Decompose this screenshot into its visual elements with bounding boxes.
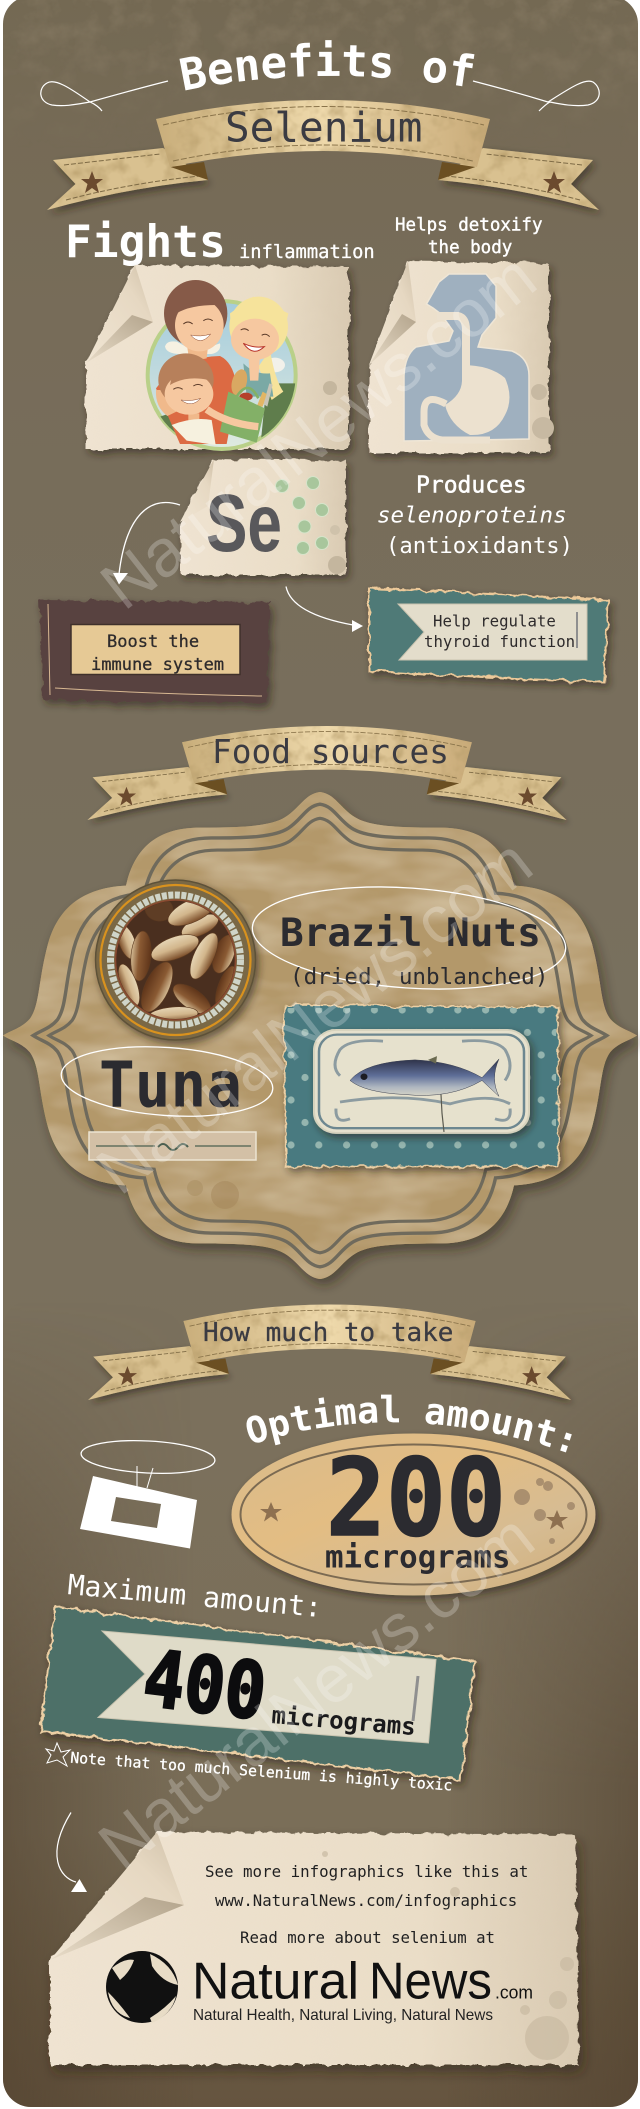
arrow: to footer bbox=[57, 1812, 87, 1892]
label: immune system: immune system bbox=[91, 655, 224, 675]
icon: selenium molecules bbox=[276, 476, 328, 554]
badge: 200 micrograms: 200 bbox=[326, 1437, 506, 1561]
panel: Se paper bbox=[180, 459, 346, 575]
heading: Helps detoxify the body: Helps detoxify bbox=[395, 216, 543, 236]
text: dried, unblanched: (dried, unblanched) bbox=[290, 964, 548, 990]
ribbon: How much to take: How much to take bbox=[203, 1318, 453, 1348]
ribbon: Selenium bbox=[47, 100, 599, 210]
badge: 200 micrograms bbox=[232, 1434, 596, 1596]
panel: tuna can card bbox=[284, 1005, 558, 1166]
text: see more infographics: See more infographics like this at bbox=[205, 1862, 528, 1881]
watermarks: NaturalNews.com: NaturalNews.com bbox=[83, 824, 546, 1209]
panel: boost the immune system bbox=[39, 600, 270, 703]
logo: Natural News wordmark: Natural bbox=[192, 1952, 359, 2010]
outline: tuna ellipse bbox=[59, 1040, 275, 1123]
heading: Maximum amount: Maximum amount: bbox=[66, 1568, 323, 1624]
decorative label plate bbox=[89, 1132, 256, 1160]
text: Brazil Nuts: Brazil Nuts bbox=[280, 910, 541, 956]
heading: Fights inflammation: inflammation bbox=[239, 242, 375, 263]
text: see more infographics: Read more about selenium at bbox=[240, 1928, 495, 1947]
ribbon: Selenium: Selenium bbox=[225, 104, 422, 152]
icon: star note marker bbox=[46, 1743, 70, 1766]
text: Tuna: Tuna bbox=[99, 1048, 242, 1122]
panel: footer paper bbox=[50, 1832, 579, 2065]
heading: Optimal amount: Optimal amount: bbox=[246, 1394, 572, 1452]
icon: human digestive system bbox=[404, 274, 529, 441]
icon: brazil nuts bowl bbox=[96, 880, 256, 1040]
label: thyroid function: thyroid function bbox=[424, 632, 575, 651]
panel: 400 micrograms bbox=[41, 1606, 475, 1780]
label: immune system bbox=[71, 624, 240, 675]
label: thyroid function: Help regulate bbox=[433, 612, 556, 630]
heading: Fights inflammation: Fights bbox=[65, 217, 226, 268]
ribbon: How much to take bbox=[88, 1304, 571, 1400]
icon: white hanging tag bbox=[80, 1438, 216, 1548]
logo: Natural News wordmark bbox=[192, 1952, 533, 2024]
flourish: right of title bbox=[473, 81, 599, 111]
heading: Helps detoxify the body: the body bbox=[428, 238, 512, 258]
label: 400 micrograms: 400 bbox=[139, 1634, 271, 1738]
watermarks: NaturalNews.com bbox=[83, 239, 550, 1884]
panel: food sources label bbox=[3, 792, 637, 1279]
text: Produces selenoproteins (antioxidants): selenoproteins bbox=[377, 502, 567, 528]
panel: help regulate thyroid function bbox=[369, 588, 608, 683]
watermarks: NaturalNews.com: NaturalNews.com bbox=[87, 239, 550, 624]
label: 400 micrograms: micrograms bbox=[270, 1701, 417, 1741]
heading: Fights inflammation bbox=[65, 217, 375, 268]
badge: 200 micrograms: micrograms bbox=[325, 1540, 510, 1576]
flourish: left of title bbox=[41, 81, 168, 111]
outline: brazil nuts ellipse bbox=[249, 877, 569, 999]
heading: Helps detoxify the body bbox=[395, 216, 543, 258]
watermarks: NaturalNews.com: NaturalNews.com bbox=[85, 1499, 548, 1884]
panel: family paper bbox=[86, 265, 349, 450]
logo: Natural News wordmark: .com bbox=[495, 1982, 533, 2002]
title: Benefits of: Benefits of bbox=[180, 40, 474, 90]
icon: tuna fish bbox=[350, 1056, 499, 1096]
label: thyroid function bbox=[398, 604, 587, 660]
arrow: to thyroid function bbox=[286, 586, 363, 632]
icon: tuna can plate bbox=[314, 1030, 529, 1133]
logo: Natural News globe bbox=[106, 1951, 178, 2023]
ribbon: Food sources: Food sources bbox=[212, 733, 449, 771]
logo: Natural News wordmark: News bbox=[369, 1952, 492, 2010]
label: immune system: Boost the bbox=[107, 632, 199, 652]
text: Produces selenoproteins (antioxidants): (antioxidants) bbox=[386, 533, 573, 559]
symbol: Se: Se bbox=[206, 478, 282, 569]
illustration: family bbox=[148, 280, 297, 450]
text: Produces selenoproteins (antioxidants) bbox=[377, 472, 573, 559]
arrow: to immune system bbox=[113, 503, 180, 584]
label: 400 micrograms bbox=[98, 1631, 436, 1743]
panel: detox paper bbox=[369, 261, 554, 453]
text: see more infographics bbox=[205, 1862, 528, 1947]
text: Produces selenoproteins (antioxidants): Produces bbox=[416, 472, 527, 498]
text: see more infographics: www.NaturalNews.com/infographics bbox=[215, 1891, 517, 1910]
note: toxicity warning: Note that too much Selenium is highly toxic bbox=[70, 1750, 453, 1795]
ribbon: Food sources bbox=[87, 726, 567, 820]
logo: Natural News wordmark: Natural Health, Natural Living, Natural News bbox=[193, 2007, 493, 2024]
